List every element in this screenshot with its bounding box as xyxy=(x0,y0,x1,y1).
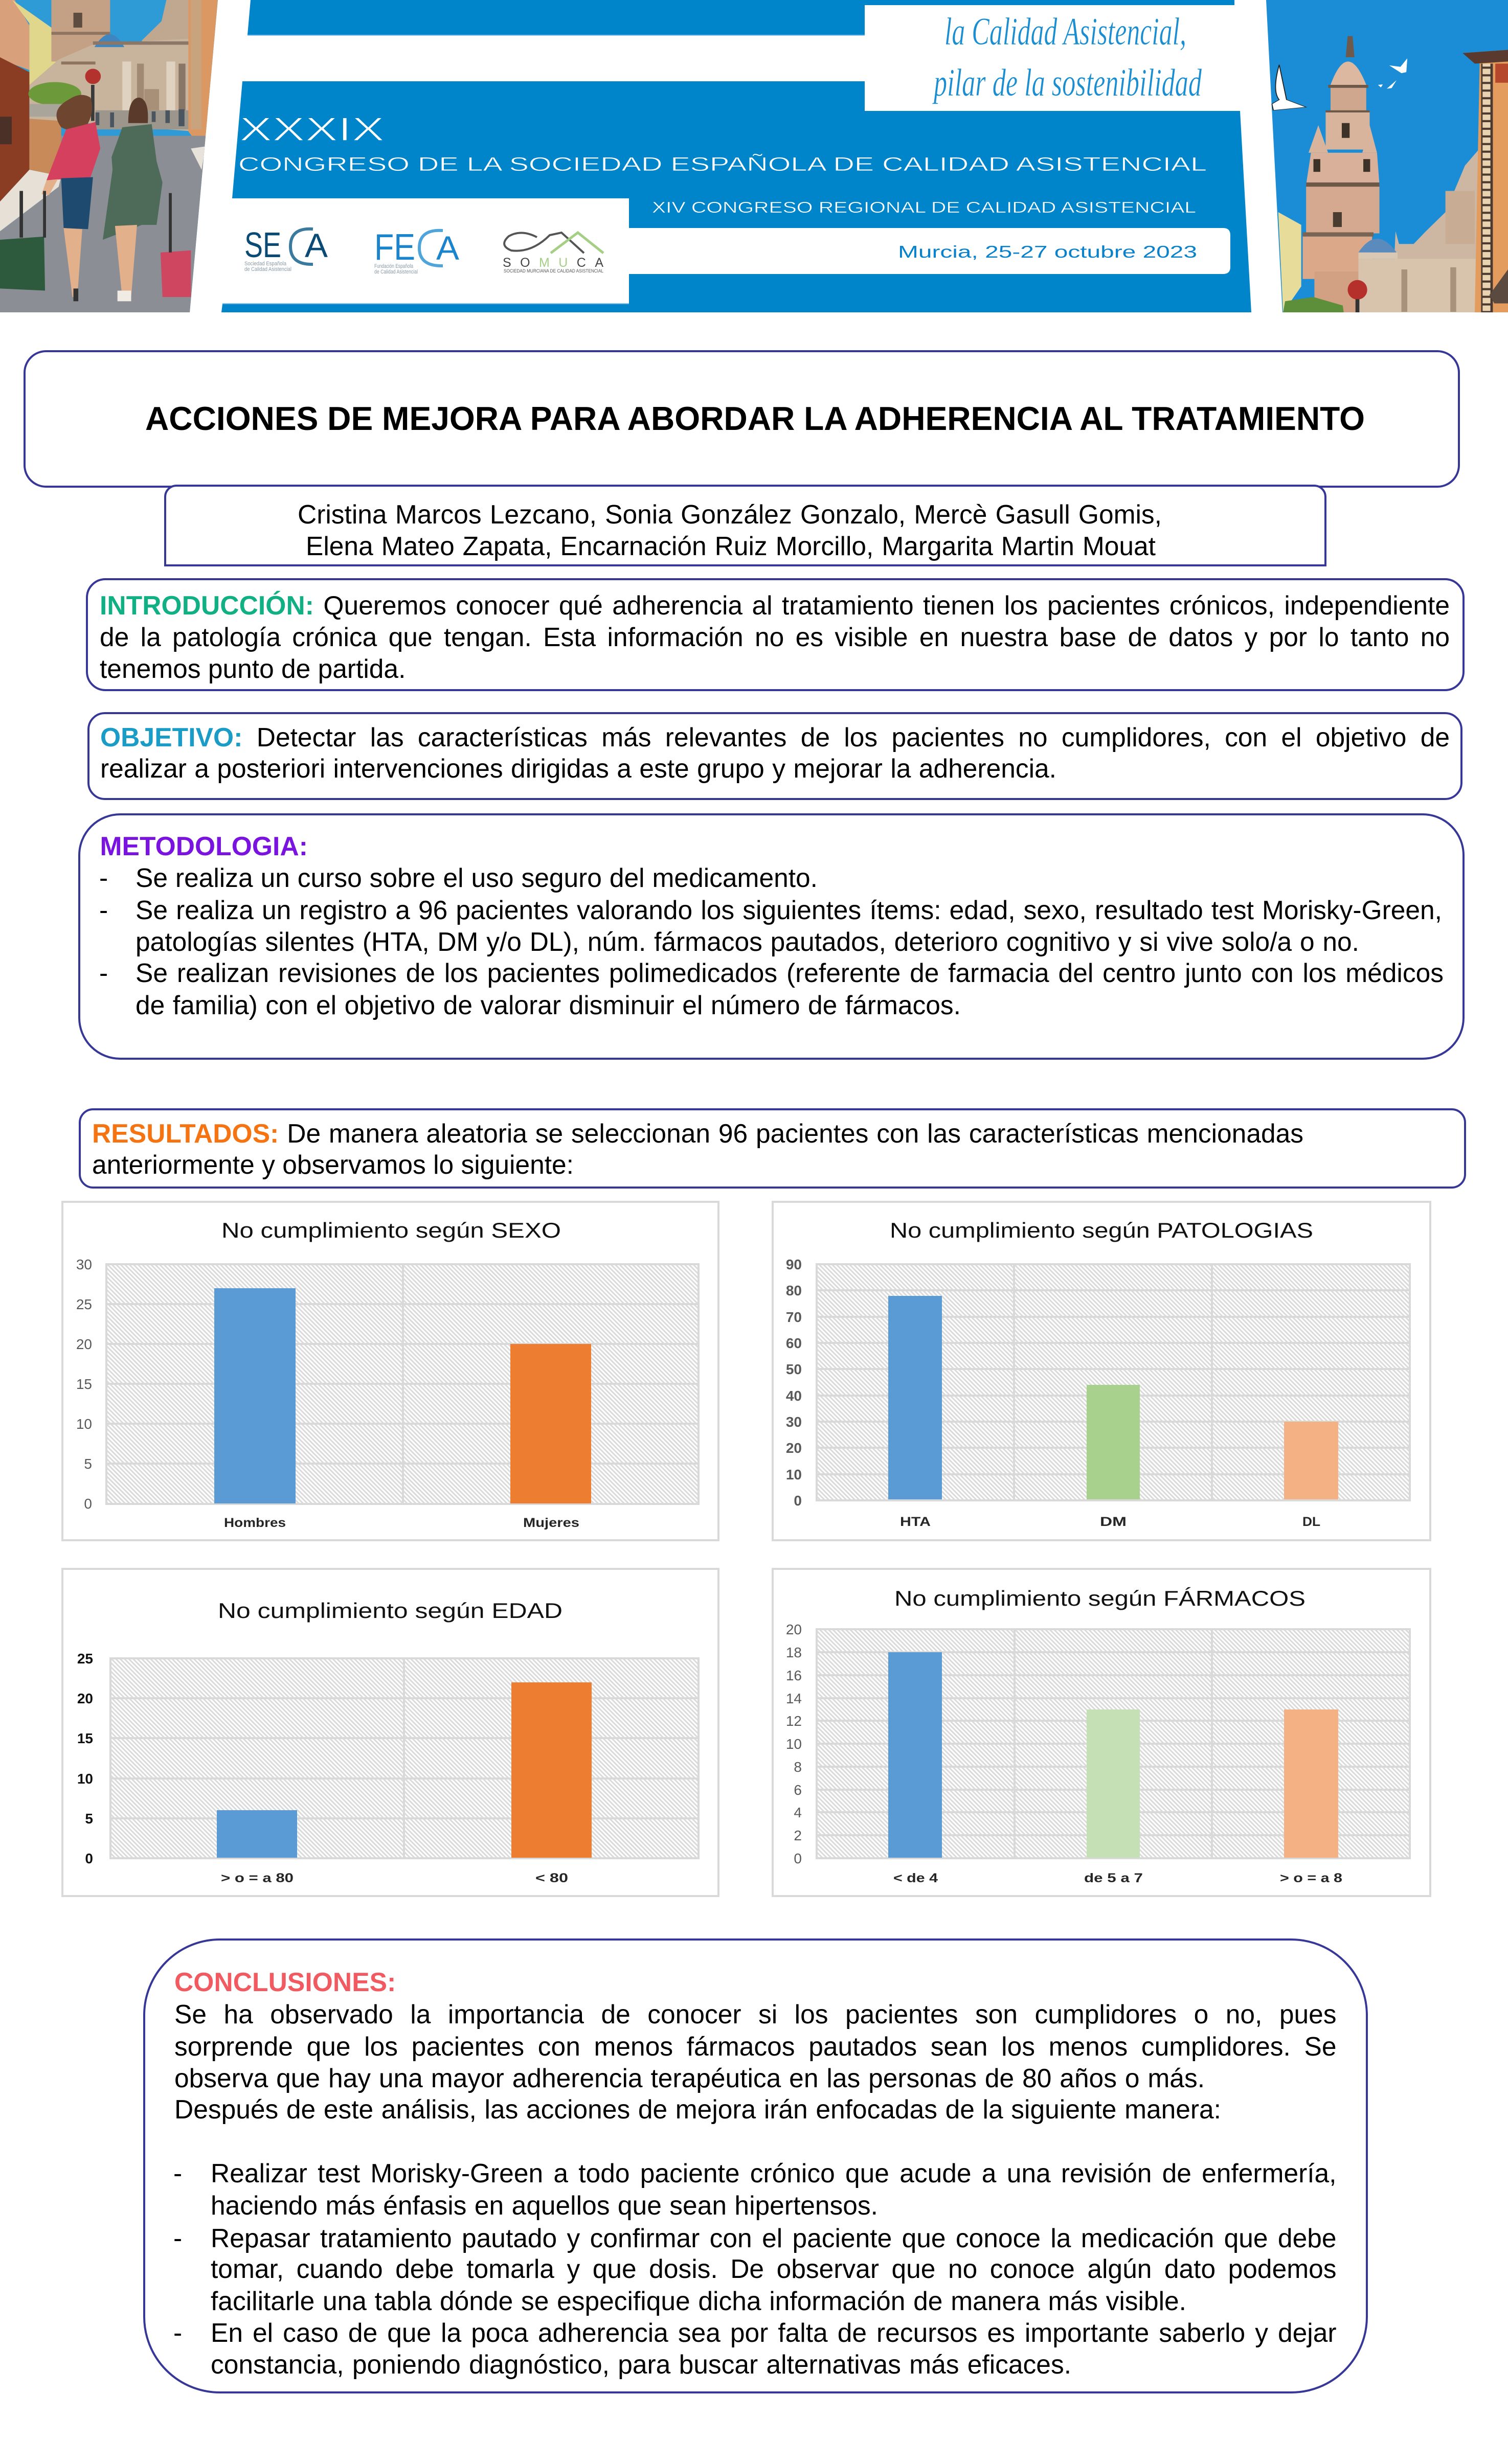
logo: SOMUCA: SOCIEDAD MURCIANA DE CALIDAD ASISTENCIAL xyxy=(504,268,603,273)
y axis labels: 20 xyxy=(786,1622,802,1637)
category labels: Mujeres xyxy=(523,1516,579,1530)
y axis labels: 90 xyxy=(786,1257,802,1272)
panel: metodología: Se realiza un registro a 96 pacientes valorando los siguientes ítems: edad, sexo, resultado test Morisky-Green, xyxy=(136,895,1442,925)
y axis labels: 40 xyxy=(786,1388,802,1404)
panel: conclusiones: haciendo más énfasis en aquellos que sean hipertensos. xyxy=(211,2190,878,2220)
y axis labels: 15 xyxy=(76,1376,92,1392)
y axis labels: 10 xyxy=(786,1467,802,1482)
y axis labels: 0 xyxy=(84,1496,92,1512)
category labels: DL xyxy=(1302,1515,1320,1529)
bar chart: no cumplimiento según sexo xyxy=(61,1201,719,1541)
chart title: No cumplimiento según EDAD xyxy=(218,1599,562,1623)
panel: resultados: RESULTADOS: De manera aleatoria se seleccionan 96 pacientes con las características mencionadas xyxy=(92,1119,1303,1148)
y axis labels xyxy=(786,1257,802,1509)
bars xyxy=(888,1296,1338,1499)
panel: objetivo xyxy=(87,712,1462,800)
panel: conclusiones: - xyxy=(173,2158,182,2188)
panel: introducción: tenemos punto de partida. xyxy=(100,654,406,683)
bar chart: no cumplimiento según fármacos xyxy=(772,1568,1431,1897)
y axis labels xyxy=(77,1651,93,1866)
category labels xyxy=(893,1871,1342,1885)
panel: objetivo: OBJETIVO: Detectar las características más relevantes de los pacientes no cumplidores, con el objetivo de xyxy=(100,722,1450,752)
panel: metodología: de familia) con el objetivo de valorar disminuir el número de fármacos. xyxy=(136,990,961,1020)
panel: resultados: anteriormente y observamos lo siguiente: xyxy=(92,1150,574,1179)
bars xyxy=(214,1288,591,1503)
y axis labels xyxy=(786,1622,802,1866)
y axis labels: 8 xyxy=(794,1759,802,1775)
category labels: DM xyxy=(1100,1515,1127,1529)
panel: conclusiones: Se ha observado la importancia de conocer si los pacientes son cumplidores o no, pues xyxy=(174,1999,1337,2028)
y axis labels xyxy=(76,1257,92,1512)
panel: objetivo: realizar a posteriori intervenciones dirigidas a este grupo y mejorar la adherencia. xyxy=(100,754,1056,783)
panel: metodología: - xyxy=(99,863,108,893)
logo: SECA: A xyxy=(305,226,328,264)
panel: metodología: Se realiza un curso sobre el uso seguro del medicamento. xyxy=(136,863,818,893)
category labels: Hombres xyxy=(224,1516,286,1530)
logo: SOMUCA: SO MU CA xyxy=(503,256,603,270)
category labels: > o = a 8 xyxy=(1280,1871,1342,1885)
panel: conclusiones: Repasar tratamiento pautado y confirmar con el paciente que conoce la medicación que debe xyxy=(211,2223,1337,2253)
left painting: two women with suitcases in a Murcia street xyxy=(0,0,220,314)
y axis labels: 0 xyxy=(85,1851,93,1866)
logo: SECA xyxy=(244,225,328,272)
y axis labels: 20 xyxy=(76,1336,92,1352)
y axis labels: 6 xyxy=(794,1782,802,1798)
banner: congress header xyxy=(0,0,1508,312)
panel: introducción: INTRODUCCIÓN: Queremos conocer qué adherencia al tratamiento tienen los pacientes crónicos, independiente xyxy=(100,590,1450,620)
logo: FECA: FE xyxy=(374,227,415,268)
blue title bands xyxy=(221,0,1251,312)
category labels: < 80 xyxy=(535,1871,568,1885)
y axis labels: 0 xyxy=(794,1851,802,1866)
y axis labels: 5 xyxy=(85,1811,93,1827)
logo: SECA: SE xyxy=(244,225,281,265)
logo: FECA: de Calidad Asistencial xyxy=(374,269,418,275)
panel: conclusiones xyxy=(143,1938,1368,2393)
category labels xyxy=(221,1871,568,1885)
panel: conclusiones: - xyxy=(173,2318,182,2347)
y axis labels: 25 xyxy=(77,1651,93,1667)
y axis labels: 30 xyxy=(786,1414,802,1430)
y axis labels: 60 xyxy=(786,1335,802,1351)
panel: resultados xyxy=(79,1108,1466,1189)
logo: SECA: Sociedad Española xyxy=(244,261,287,267)
panel: introducción xyxy=(86,578,1465,691)
y axis labels: 15 xyxy=(77,1730,93,1746)
panel: conclusiones: - xyxy=(173,2223,182,2253)
panel: metodología: METODOLOGIA: xyxy=(100,831,308,861)
panel: conclusiones: Realizar test Morisky-Green a todo paciente crónico que acude a una revisión de enfermería, xyxy=(211,2158,1337,2188)
logo: SECA: de Calidad Asistencial xyxy=(244,266,291,272)
y axis labels: 2 xyxy=(794,1828,802,1843)
chart title: No cumplimiento según SEXO xyxy=(221,1218,561,1242)
logo: FECA: A xyxy=(436,229,459,267)
panel: conclusiones: observa que hay una mayor adherencia terapéutica en las personas de 80 años o más. xyxy=(174,2063,1205,2093)
y axis labels: 70 xyxy=(786,1309,802,1325)
chart title: No cumplimiento según PATOLOGIAS xyxy=(890,1218,1313,1242)
panel: authors: Cristina Marcos Lezcano, Sonia González Gonzalo, Mercè Gasull Gomis, xyxy=(298,499,1162,529)
right painting: Murcia cathedral tower xyxy=(1259,0,1508,314)
panel: conclusiones: Después de este análisis, las acciones de mejora irán enfocadas de la siguiente manera: xyxy=(174,2094,1221,2124)
y axis labels: 4 xyxy=(794,1805,802,1820)
place and date: Murcia, 25-27 octubre 2023 xyxy=(898,242,1197,261)
y axis labels: 80 xyxy=(786,1283,802,1298)
logo: SOMUCA xyxy=(503,233,603,273)
panel: conclusiones: constancia, poniendo diagnóstico, para buscar alternativas más eficaces. xyxy=(211,2349,1071,2379)
y axis labels: 10 xyxy=(786,1736,802,1752)
panel: metodología: Se realizan revisiones de los pacientes polimedicados (referente de farmacia del centro junto con los médicos xyxy=(136,958,1444,988)
panel: introducción: de la patología crónica que tengan. Esta información no es visible en nuestra base de datos y por lo tanto no xyxy=(100,622,1450,652)
y axis labels: 18 xyxy=(786,1645,802,1660)
panel: title xyxy=(24,350,1460,488)
panel: conclusiones: En el caso de que la poca adherencia sea por falta de recursos es importante saberlo y dejar xyxy=(211,2318,1337,2347)
y axis labels: 14 xyxy=(786,1691,802,1706)
y axis labels: 16 xyxy=(786,1668,802,1683)
panel: authors: Elena Mateo Zapata, Encarnación Ruiz Morcillo, Margarita Martin Mouat xyxy=(306,531,1156,561)
panel: metodología: - xyxy=(99,958,108,988)
category labels: > o = a 80 xyxy=(221,1871,294,1885)
panel: conclusiones: facilitarle una tabla dónde se especifique dicha información de manera más visible. xyxy=(211,2286,1186,2316)
congress number: XXXIX xyxy=(239,110,385,148)
panel: conclusiones: tomar, cuando debe tomarla y que dosis. De observar que no conoce algún dato podemos xyxy=(211,2254,1337,2284)
panel: metodología: patologías silentes (HTA, DM y/o DL), núm. fármacos pautados, deterioro cognitivo y si vive solo/a o no. xyxy=(136,927,1359,956)
category labels xyxy=(900,1515,1320,1529)
panel: conclusiones: CONCLUSIONES: xyxy=(174,1967,396,1997)
bar chart: no cumplimiento según edad xyxy=(61,1568,719,1897)
slogan: pilar de la sostenibilidad xyxy=(932,61,1202,104)
panel: metodología xyxy=(78,813,1465,1060)
bars xyxy=(217,1682,592,1858)
y axis labels: 0 xyxy=(794,1493,802,1509)
y axis labels: 30 xyxy=(76,1257,92,1272)
bar chart: no cumplimiento según patologías xyxy=(772,1201,1431,1541)
y axis labels: 10 xyxy=(76,1416,92,1432)
y axis labels: 12 xyxy=(786,1713,802,1729)
regional congress name: XIV CONGRESO REGIONAL DE CALIDAD ASISTENCIAL xyxy=(652,198,1196,216)
logo: FECA: Fundación Española xyxy=(374,263,414,269)
y axis labels: 20 xyxy=(786,1440,802,1456)
panel: conclusiones: sorprende que los pacientes con menos fármacos pautados sean los menos cumplidores. Se xyxy=(174,2032,1337,2061)
heading: poster title: ACCIONES DE MEJORA PARA ABORDAR LA ADHERENCIA AL TRATAMIENTO xyxy=(145,400,1365,437)
y axis labels: 20 xyxy=(77,1691,93,1706)
bars xyxy=(888,1652,1338,1858)
congress name: CONGRESO DE LA SOCIEDAD ESPAÑOLA DE CALIDAD ASISTENCIAL xyxy=(238,153,1207,175)
category labels xyxy=(224,1516,579,1530)
category labels: de 5 a 7 xyxy=(1084,1871,1143,1885)
panel: authors xyxy=(164,485,1326,566)
y axis labels: 50 xyxy=(786,1361,802,1377)
logo: FECA xyxy=(374,227,459,275)
y axis labels: 10 xyxy=(77,1771,93,1787)
panel: metodología: - xyxy=(99,895,108,925)
chart title: No cumplimiento según FÁRMACOS xyxy=(894,1586,1306,1610)
y axis labels: 5 xyxy=(84,1456,92,1472)
slogan xyxy=(932,10,1202,104)
slogan: la Calidad Asistencial, xyxy=(944,10,1186,53)
category labels: < de 4 xyxy=(893,1871,938,1885)
category labels: HTA xyxy=(900,1515,931,1529)
y axis labels: 25 xyxy=(76,1296,92,1312)
